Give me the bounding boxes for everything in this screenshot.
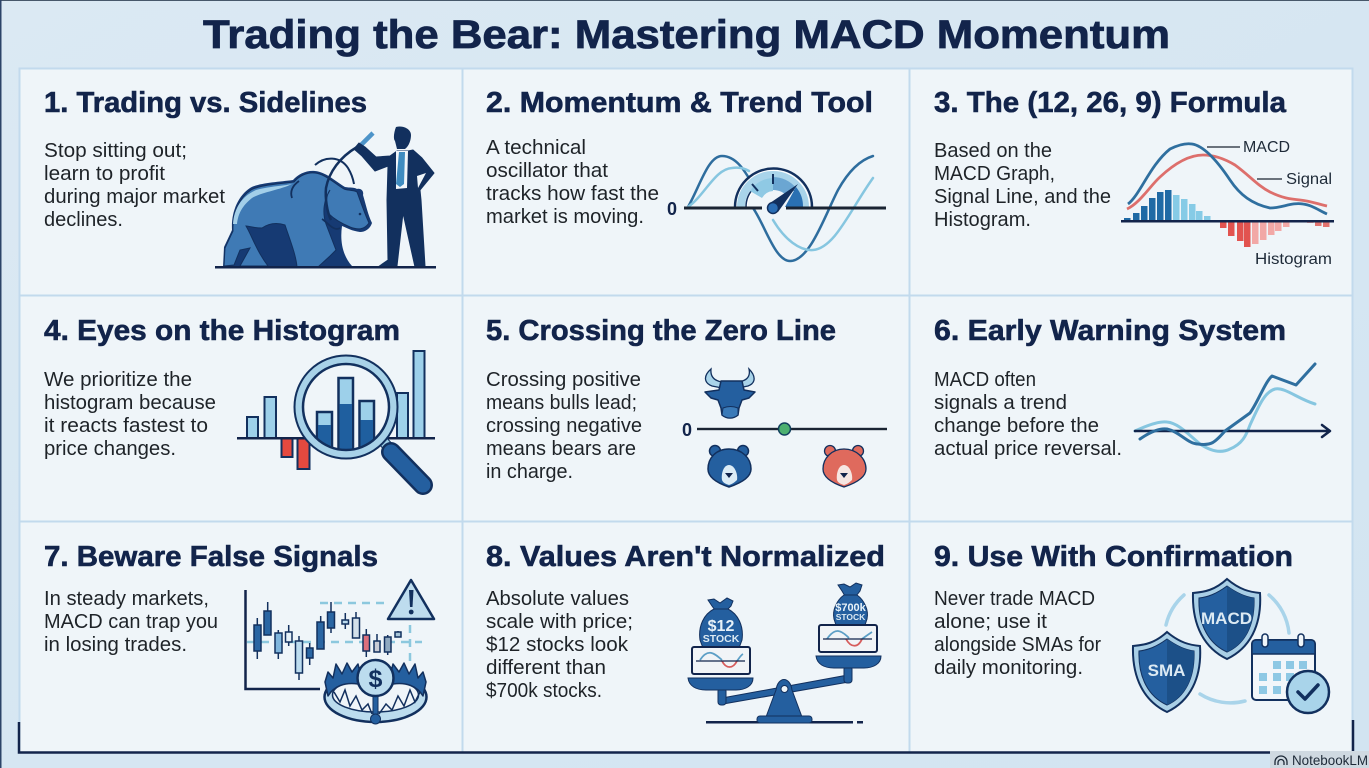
left pan and $12 stock bag: $12 <box>708 618 734 635</box>
text block 3: Histogram. <box>934 209 1031 231</box>
text block 8: different than <box>486 657 606 679</box>
text block 9 <box>934 588 1101 679</box>
text block 2 <box>486 137 659 228</box>
text block 1: Stop sitting out; <box>44 140 187 162</box>
text block 4: histogram because <box>44 392 216 414</box>
label: MACD: MACD <box>1243 139 1290 156</box>
axis label zero: 0 <box>667 199 677 219</box>
panel: 1 Trading vs. Sidelines <box>20 68 462 296</box>
heading 6: 6. Early Warning System <box>934 315 1286 347</box>
label: Signal <box>1257 171 1332 188</box>
text block 6: signals a trend <box>934 392 1067 414</box>
calendar <box>1252 634 1329 713</box>
icon: histogram under magnifying glass <box>237 351 435 485</box>
text block 3: Based on the <box>934 140 1052 162</box>
text block 3: MACD Graph, <box>934 163 1055 185</box>
text block 8 <box>486 588 633 702</box>
text block 9: Never trade MACD <box>934 588 1095 610</box>
panel: 6 Early Warning System <box>910 296 1352 522</box>
text block 4: it reacts fastest to <box>44 415 208 437</box>
heading 8: 8. Values Aren't Normalized <box>486 541 885 573</box>
heading 1: 1. Trading vs. Sidelines <box>44 87 367 119</box>
bear <box>223 147 372 267</box>
text block 3 <box>934 140 1111 231</box>
icon: balance scale <box>688 583 881 724</box>
text block 6 <box>934 369 1122 460</box>
text block 2: market is moving. <box>486 206 644 228</box>
left pan and $12 stock bag <box>688 598 753 690</box>
text block 4: price changes. <box>44 438 176 460</box>
text block 5: Crossing positive <box>486 369 641 391</box>
icon: red bear <box>823 446 866 487</box>
right pan and $700k stock bag <box>816 583 881 668</box>
panel: 8 Values Aren't Normalized <box>462 522 910 752</box>
text block 2: tracks how fast the <box>486 183 659 205</box>
text block 4: We prioritize the <box>44 369 192 391</box>
text block 2: A technical <box>486 137 586 159</box>
text block 6: actual price reversal. <box>934 438 1122 460</box>
bear trap: $ <box>369 665 383 693</box>
chart: early warning lines <box>1135 364 1330 451</box>
heading 7: 7. Beware False Signals <box>44 541 378 573</box>
text block 7: MACD can trap you <box>44 611 218 633</box>
heading 4: 4. Eyes on the Histogram <box>44 315 400 347</box>
icon: blue bear <box>708 446 751 487</box>
text block 9: daily monitoring. <box>934 657 1083 679</box>
text block 8: scale with price; <box>486 611 633 633</box>
left pan and $12 stock bag: STOCK <box>703 633 740 645</box>
text block 1: learn to profit <box>44 163 165 185</box>
icon: bull <box>705 369 755 418</box>
candlesticks <box>254 602 401 680</box>
axis: zero line <box>682 420 887 440</box>
text block 9: alone; use it <box>934 611 1047 633</box>
panel: 7 Beware False Signals <box>20 522 462 752</box>
text block 7 <box>44 588 218 656</box>
chart: MACD, signal and histogram <box>1121 139 1334 268</box>
text block 5: crossing negative <box>486 415 642 437</box>
text block 8: $12 stocks look <box>486 634 629 656</box>
text block 5: means bears are <box>486 438 636 460</box>
shield: SMA <box>1133 632 1200 712</box>
title: Trading the Bear: Mastering MACD Momentum <box>203 13 1170 57</box>
text block 5: in charge. <box>486 461 573 483</box>
right pan and $700k stock bag: STOCK <box>836 612 866 622</box>
heading 3: 3. The (12, 26, 9) Formula <box>934 87 1287 119</box>
heading 9: 9. Use With Confirmation <box>934 541 1293 573</box>
panel: 9 Use With Confirmation <box>910 522 1352 752</box>
label: Histogram: Histogram <box>1255 251 1332 268</box>
axis: zero line: 0 <box>682 420 692 440</box>
label: MACD <box>1207 139 1290 156</box>
text block 7: in losing trades. <box>44 634 187 656</box>
warning triangle <box>388 580 434 619</box>
text block 4 <box>44 369 216 460</box>
chart: oscillator with gauge <box>667 156 886 261</box>
text block 9: alongside SMAs for <box>934 634 1101 656</box>
text block 1: during major market <box>44 186 225 208</box>
label: Signal: Signal <box>1286 171 1332 188</box>
panel: 5 Crossing the Zero Line <box>462 296 910 522</box>
text block 8: Absolute values <box>486 588 629 610</box>
shield: MACD: MACD <box>1201 609 1252 628</box>
text block 7: In steady markets, <box>44 588 209 610</box>
shield: MACD <box>1193 579 1260 659</box>
icon: bear and trader <box>215 126 436 269</box>
shield: SMA: SMA <box>1148 661 1185 680</box>
text block 8: $700k stocks. <box>486 680 602 702</box>
text block 6: change before the <box>934 415 1099 437</box>
right pan and $700k stock bag: $700k <box>835 602 867 614</box>
text block 6: MACD often <box>934 369 1036 391</box>
trader <box>354 126 434 267</box>
panel: 4 Eyes on the Histogram <box>20 296 462 522</box>
text block 2: oscillator that <box>486 160 608 182</box>
text block 5: means bulls lead; <box>486 392 637 414</box>
icon: candlesticks, warning and trap <box>246 580 434 724</box>
text block 3: Signal Line, and the <box>934 186 1111 208</box>
panel: 3 The (12, 26, 9) Formula <box>910 68 1352 296</box>
text block 1 <box>44 140 225 231</box>
bear trap <box>324 660 426 724</box>
text block 1: declines. <box>44 209 123 231</box>
heading 5: 5. Crossing the Zero Line <box>486 315 836 347</box>
heading 2: 2. Momentum & Trend Tool <box>486 87 873 119</box>
text block 5 <box>486 369 642 483</box>
icon: shields and calendar <box>1133 579 1329 713</box>
panel: 2 Momentum & Trend Tool <box>462 68 910 296</box>
